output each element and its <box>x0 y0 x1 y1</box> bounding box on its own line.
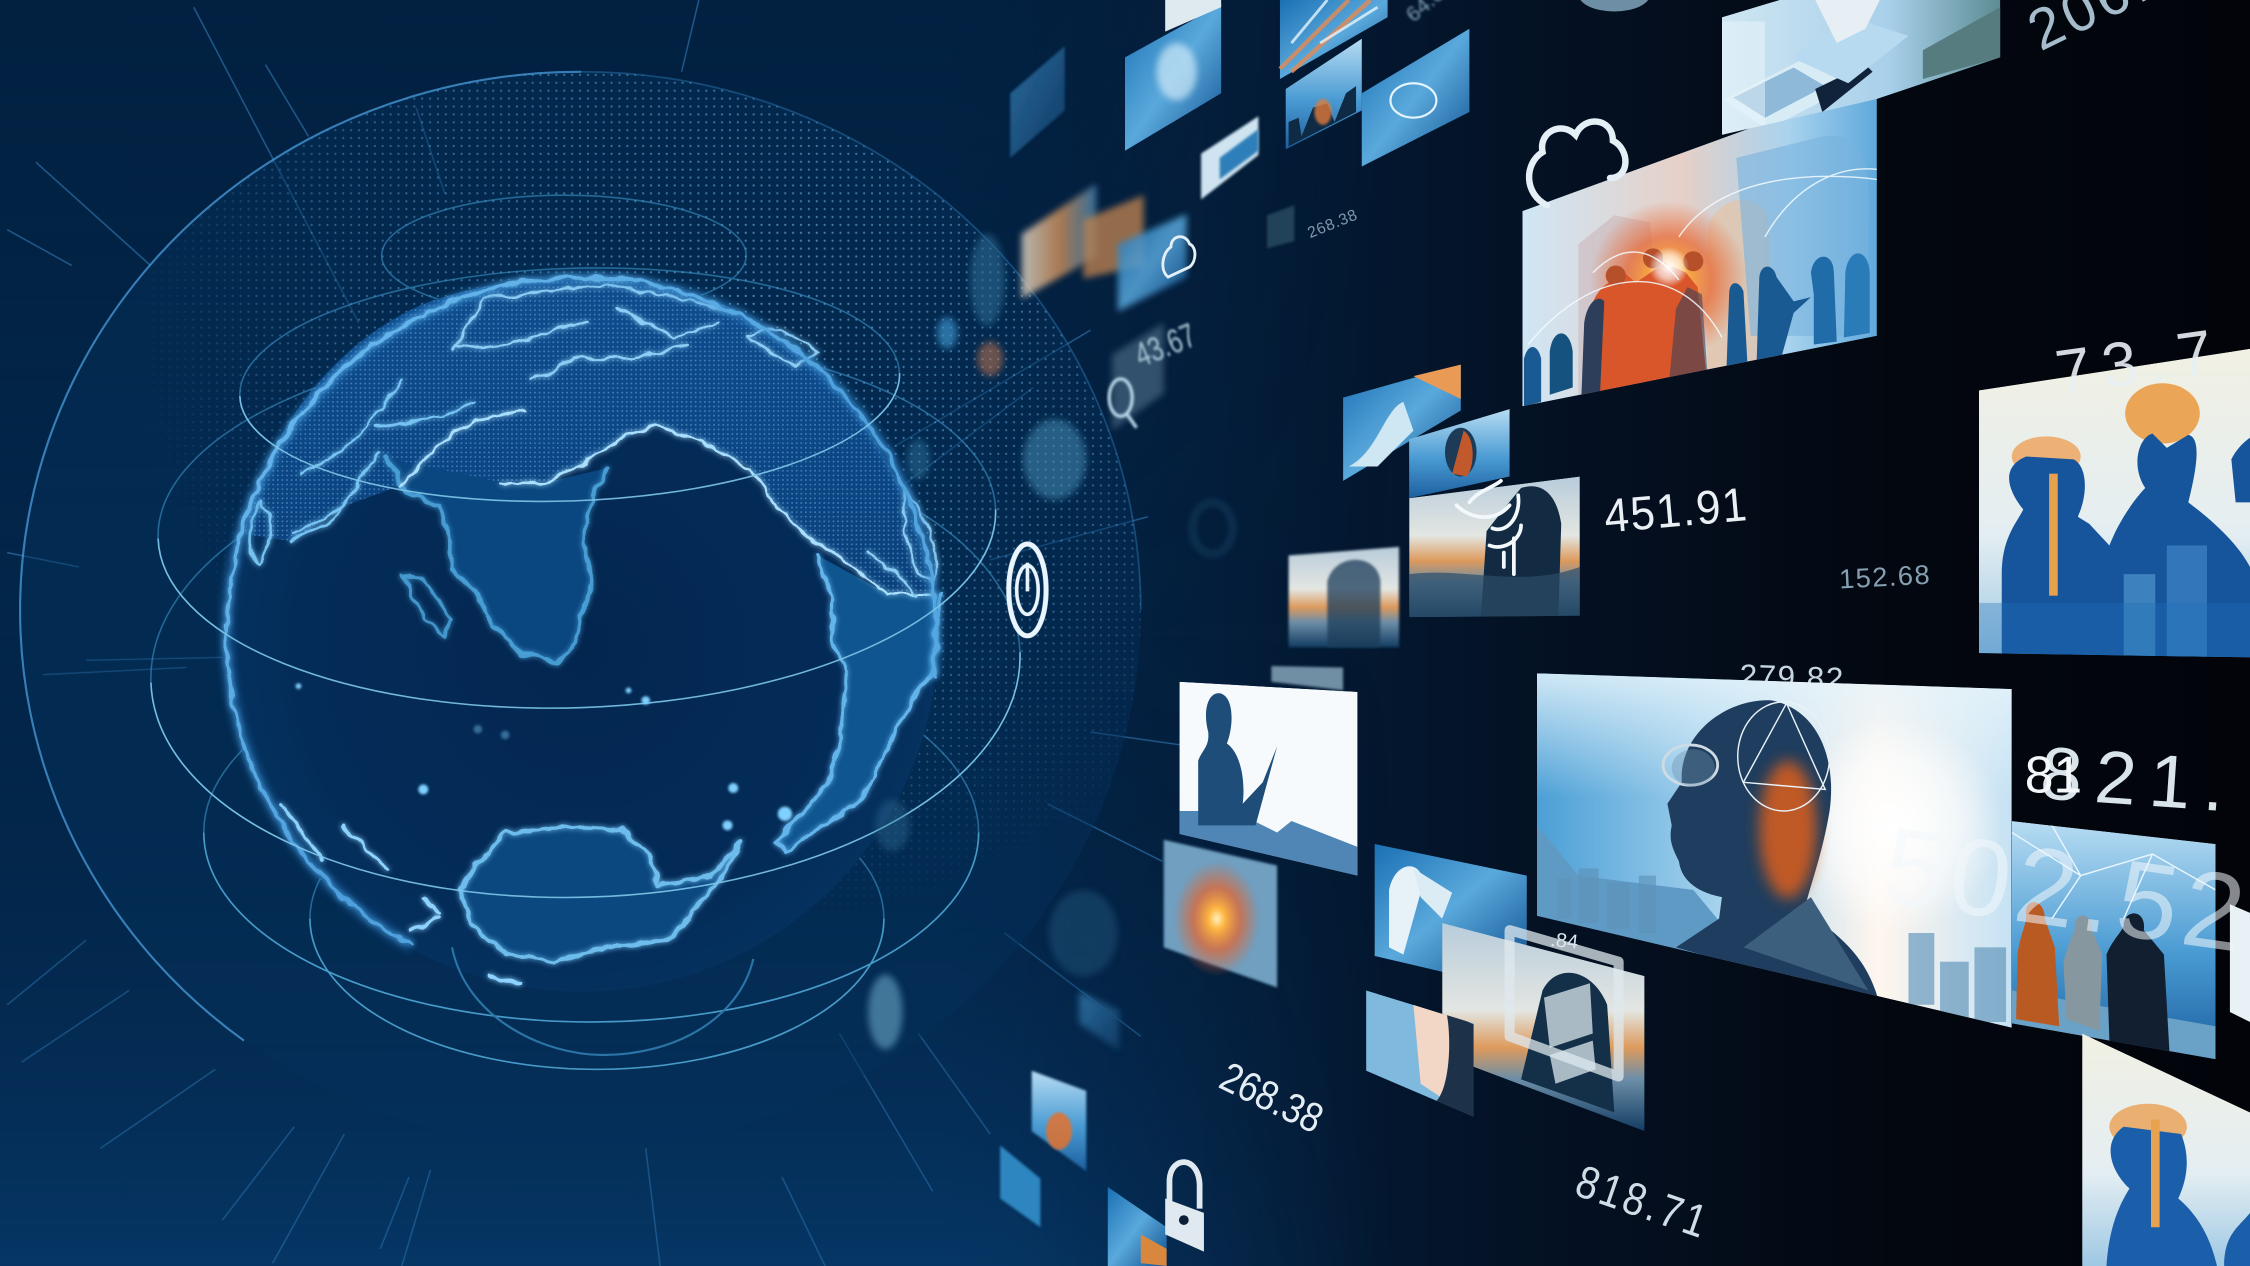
northern land dotted <box>244 279 934 594</box>
right silhouette panel <box>1979 349 2250 657</box>
icon: brain <box>1456 481 1521 574</box>
antarctica <box>461 827 740 963</box>
number labels: 502.52 <box>1876 804 2250 976</box>
number labels: 268.38 <box>1305 207 1360 242</box>
number labels: 818.71 <box>1569 1156 1716 1249</box>
number labels <box>1130 0 2250 1249</box>
continent outlines <box>250 284 940 982</box>
man panel <box>1537 673 2012 1028</box>
white sliver panel <box>2230 904 2250 1022</box>
number labels: 43.67 <box>1130 317 1201 375</box>
island dots and streaks <box>296 683 792 830</box>
radial light rays <box>7 0 1191 1266</box>
south america <box>776 555 940 851</box>
bottom right silhouette panel <box>2082 1033 2250 1266</box>
icon: calendar <box>1510 930 1619 1077</box>
background <box>0 0 1769 1266</box>
orbit rings in front of globe <box>151 373 1028 1069</box>
africa <box>386 458 608 662</box>
icon: small cloud <box>1163 237 1195 277</box>
icon: large cloud <box>1529 121 1625 205</box>
three people panel <box>2012 821 2216 1059</box>
icon: power <box>1009 544 1046 636</box>
number labels: 81 <box>2025 745 2082 803</box>
dusk panel <box>1409 477 1580 617</box>
robot panel <box>1375 844 1527 972</box>
icon: top circle <box>1578 0 1650 11</box>
globe rim <box>227 277 935 946</box>
orange panel <box>1164 840 1277 988</box>
number labels: 821. <box>2038 730 2240 828</box>
sunset tablet panel <box>1442 923 1644 1131</box>
woman panel <box>1180 682 1357 878</box>
icon: magnifier <box>1109 379 1136 428</box>
team panel <box>1522 82 1877 406</box>
small panels, upper left column <box>1010 0 1469 431</box>
inner globe <box>224 274 940 992</box>
number labels: 451.91 <box>1602 478 1750 543</box>
small panels, mid cluster <box>1289 365 1510 647</box>
orbit rings behind globe <box>143 195 1028 1069</box>
small panel above woman <box>1271 666 1343 690</box>
number labels: 152.68 <box>1838 559 1932 594</box>
number behind man panel: 279.82 <box>1739 657 1845 697</box>
number labels: 268.38 <box>1213 1054 1330 1143</box>
small panels, lower left <box>1000 992 1167 1266</box>
blurred bokeh panels on sphere <box>868 234 1233 1049</box>
outer dotted sphere <box>19 70 1142 1075</box>
number labels: .84 <box>1549 929 1579 954</box>
face panel <box>1366 990 1478 1122</box>
desk panel <box>1722 0 2000 136</box>
number labels: 73.7 <box>2051 316 2228 409</box>
icon: lock <box>1165 1162 1204 1252</box>
